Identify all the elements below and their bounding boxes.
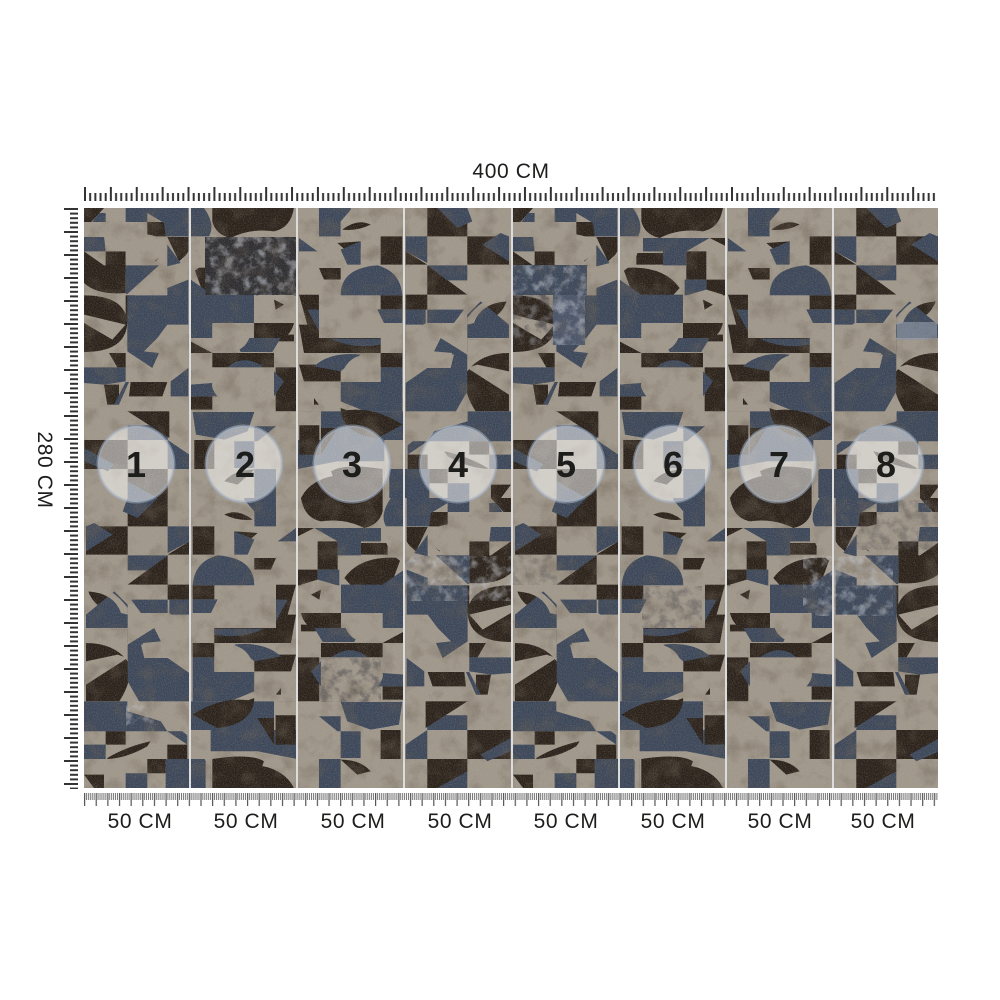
panel marker 8: 8 [876, 444, 896, 485]
panel marker 5: 5 [556, 444, 576, 485]
panel width labels [108, 810, 915, 833]
panel marker 2 [206, 426, 282, 502]
panel width labels: 50 CM [428, 810, 492, 833]
panel width labels: 50 CM [851, 810, 915, 833]
panel marker 4: 4 [448, 444, 468, 485]
panel marker 5 [528, 426, 604, 502]
dimension: total height label: 280 CM [33, 431, 56, 509]
panel width labels: 50 CM [108, 810, 172, 833]
ruler: left scale [64, 208, 78, 789]
panel 2 and 5: mottled cloud patches [126, 237, 938, 731]
panel marker 3: 3 [342, 444, 362, 485]
panel marker 2: 2 [235, 444, 255, 485]
panel marker 3 [314, 426, 390, 502]
dimension: total width label: 400 CM [472, 160, 550, 183]
panel marker 4 [420, 426, 496, 502]
panel width labels: 50 CM [214, 810, 278, 833]
panel width labels: 50 CM [641, 810, 705, 833]
panel marker 6: 6 [663, 444, 683, 485]
ruler: top scale [84, 187, 938, 201]
panel width labels: 50 CM [748, 810, 812, 833]
mural: geometric pattern panels [83, 208, 941, 788]
ruler: bottom scale [84, 793, 938, 807]
panel marker 1 [98, 426, 174, 502]
panel marker 7: 7 [769, 444, 789, 485]
panel separators [190, 208, 833, 788]
panel marker 8 [847, 426, 923, 502]
panel marker 6 [634, 426, 710, 502]
panel width labels: 50 CM [534, 810, 598, 833]
panel marker 7 [740, 426, 816, 502]
panel width labels: 50 CM [321, 810, 385, 833]
panel marker 1: 1 [126, 444, 146, 485]
